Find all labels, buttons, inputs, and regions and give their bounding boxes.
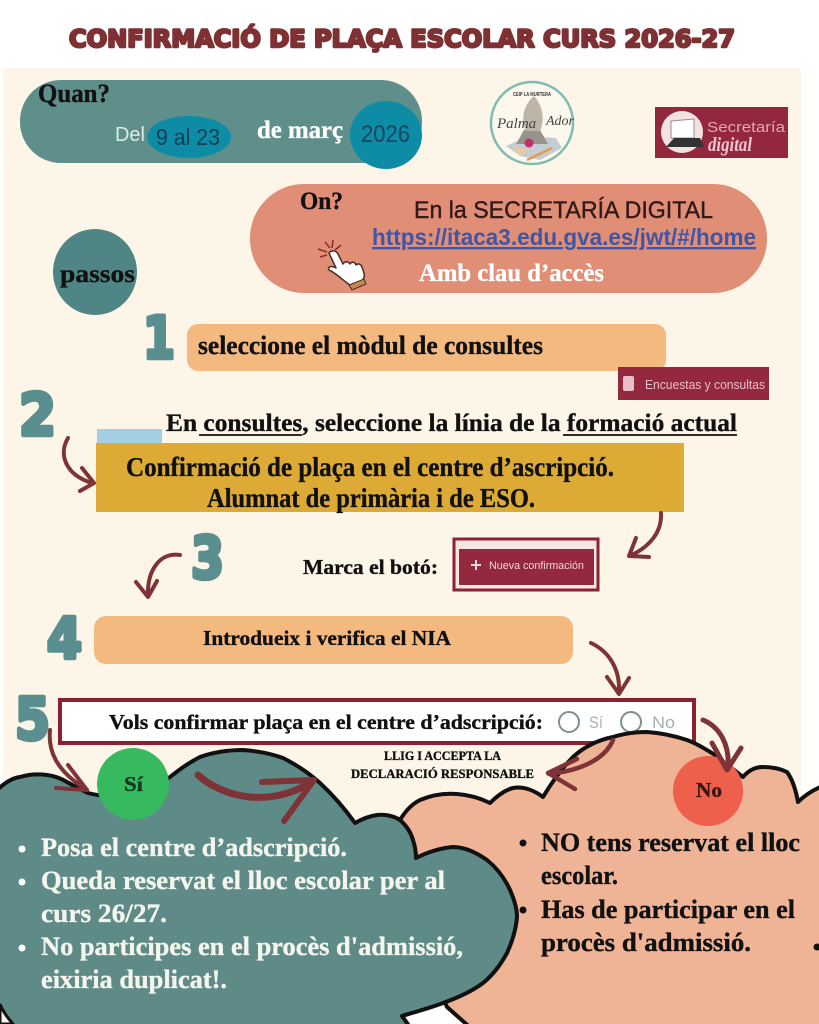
badge: si <box>97 748 169 820</box>
text: de març: de març <box>257 117 343 144</box>
icon: secretaria digital logo: digital <box>708 134 752 156</box>
badge: no <box>673 756 743 826</box>
button: nueva confirmacion: Nueva confirmación <box>489 560 584 572</box>
list: no outcomes <box>520 828 819 957</box>
list: si outcomes: curs 26/27. <box>41 899 167 928</box>
step 5 question box <box>60 700 694 743</box>
button: nueva confirmacion <box>454 539 598 590</box>
arrow: question to si <box>50 730 87 790</box>
text: step 2 instruction: En consultes, seleccione la línia de la formació actual <box>166 410 737 437</box>
text: del: Del <box>115 124 145 146</box>
label: on: On? <box>300 188 343 215</box>
list: si outcomes: eixiria duplicat!. <box>41 965 227 994</box>
cloud: si <box>0 750 517 1024</box>
badge: passos <box>53 229 137 315</box>
icon: secretaria digital logo: Secretaría <box>707 119 786 136</box>
list: no outcomes: NO tens reservat el lloc <box>541 828 800 857</box>
list: si outcomes <box>18 833 463 994</box>
text: amb clau: Amb clau d’accès <box>419 260 604 287</box>
icon: school logo: CEIP LA MURTERA <box>513 92 551 98</box>
bottom white wedge between clouds <box>395 1005 475 1024</box>
list: no outcomes: Has de participar en el <box>541 895 795 924</box>
cloud: no <box>400 732 819 1024</box>
date badge: 9 al 23 <box>147 116 231 158</box>
step 2 gold box <box>96 443 684 513</box>
badge: passos: passos <box>60 261 135 288</box>
step 4 number: 4 <box>47 607 82 672</box>
panel: on <box>250 184 767 293</box>
text: 9 al 23: 9 al 23 <box>156 124 220 150</box>
arrow: si option to declaration <box>548 740 613 789</box>
step 1 bar <box>187 324 666 371</box>
list: si outcomes: No participes en el procès d'admissió, <box>41 932 463 961</box>
list: no outcomes: escolar. <box>541 861 618 890</box>
list: si outcomes: Queda reservat el lloc escolar per al <box>41 866 445 895</box>
arrow: step 4 to step 5 <box>591 643 629 694</box>
arrow: gold box to button <box>629 513 661 557</box>
step 4 bar: Introdueix i verifica el NIA <box>203 626 452 650</box>
icon: school logo <box>491 82 575 164</box>
arrow: question to no <box>703 720 741 770</box>
step 3 number: 3 <box>191 524 224 592</box>
radio: no: No <box>652 713 675 732</box>
label: quan: Quan? <box>38 79 110 108</box>
step 4 bar <box>94 616 573 664</box>
arrow: to step 4 <box>136 555 180 597</box>
text: 2026: 2026 <box>361 121 410 148</box>
small blue tab <box>97 429 162 443</box>
arrow: si to declaration <box>198 775 314 821</box>
list: no outcomes: procès d'admissió. <box>541 928 751 957</box>
text: declaracio responsable: DECLARACIÓ RESPONSABLE <box>351 766 534 781</box>
step 2 gold box: Confirmació de plaça en el centre d’ascripció. <box>126 452 614 482</box>
step 5 number: 5 <box>15 685 50 753</box>
icon: school logo: Palma <box>496 116 536 132</box>
radio: no <box>621 712 675 732</box>
icon: secretaria digital logo <box>655 107 788 158</box>
text: declaracio responsable: LLIG I ACCEPTA LA <box>384 748 502 763</box>
radio: si: Sí <box>589 713 603 732</box>
year badge: 2026 <box>350 101 422 169</box>
step 2 gold box: Alumnat de primària i de ESO. <box>207 483 535 513</box>
badge: si: Sí <box>124 772 144 796</box>
link: https://itaca3.edu.gva.es/jwt/#/home <box>372 224 756 250</box>
button: encuestas y consultas <box>618 367 769 400</box>
title: CONFIRMACIÓ DE PLAÇA ESCOLAR CURS 2026-27 <box>69 23 735 53</box>
button: encuestas y consultas: Encuestas y consultas <box>645 377 765 392</box>
arrow: to gold box <box>64 438 94 491</box>
radio: si <box>559 712 603 732</box>
step 2 number: 2 <box>19 381 56 449</box>
step 5 question box: Vols confirmar plaça en el centre d’adscripció: <box>109 710 543 734</box>
text: declaracio responsable <box>351 748 534 781</box>
step 1 number: 1 <box>143 304 175 372</box>
bottom-left corner of cloud <box>0 1004 13 1024</box>
step 1 bar: seleccione el mòdul de consultes <box>198 331 543 360</box>
list: si outcomes: Posa el centre d’adscripció. <box>41 833 347 862</box>
badge: no: No <box>696 778 722 802</box>
icon: school logo: Ador <box>545 114 575 129</box>
text: secretaria digital: En la SECRETARÍA DIGITAL <box>414 197 713 224</box>
panel: quan <box>20 79 422 169</box>
icon: pointing hand <box>318 240 366 290</box>
text: marca el boto: Marca el botó: <box>303 555 438 579</box>
